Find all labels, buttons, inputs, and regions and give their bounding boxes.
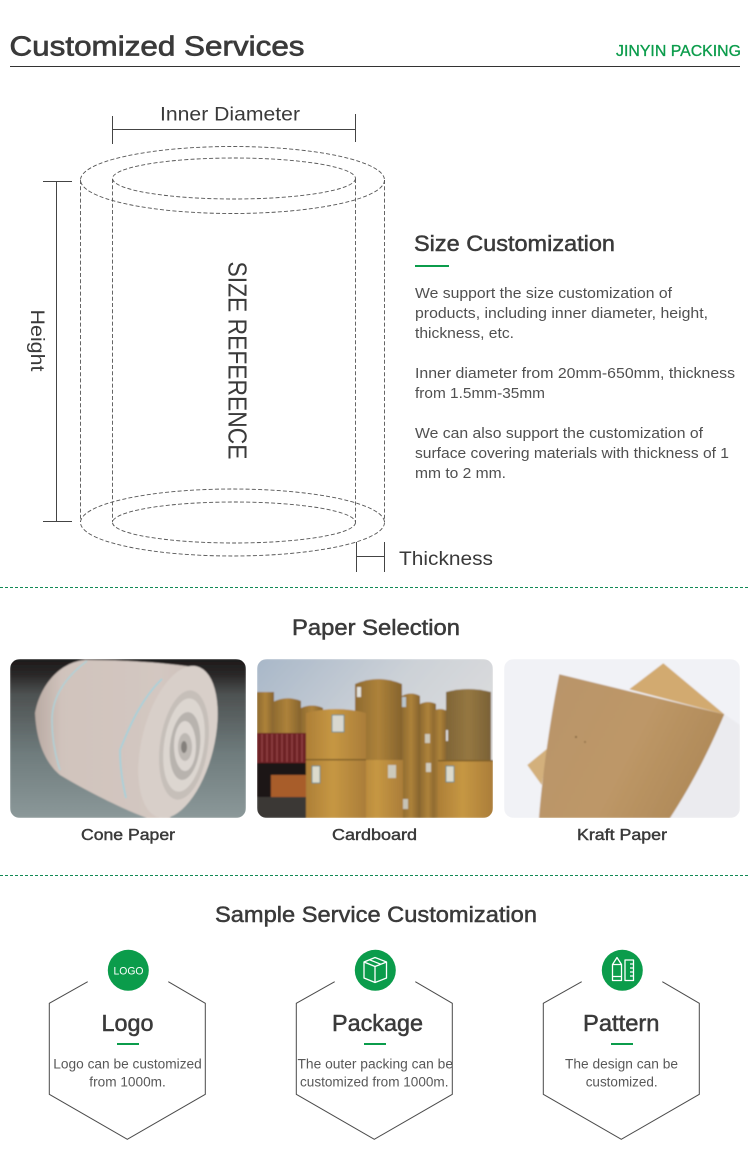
size customization text block — [414, 231, 735, 482]
caption: cardboard: Cardboard — [332, 827, 417, 844]
hexagon outline — [296, 982, 452, 1139]
card description: from 1000m. — [89, 1074, 166, 1090]
caption: cone paper: Cone Paper — [81, 827, 176, 844]
header — [10, 30, 741, 66]
card description: The outer packing can be — [298, 1056, 453, 1072]
sample service heading: Sample Service Customization — [215, 902, 537, 927]
paragraph: products: We support the size customization of — [415, 286, 673, 302]
paragraph: products — [415, 286, 708, 342]
icon: pencil and ruler — [602, 950, 643, 991]
card description: customized. — [586, 1074, 658, 1090]
paragraph: surface materials: surface covering materials with thickness of 1 — [415, 446, 729, 462]
paragraph: products: products, including inner diameter, height, — [415, 306, 708, 322]
height dimension: Height — [26, 310, 47, 372]
hexagon outline — [49, 982, 205, 1139]
caption: kraft paper: Kraft Paper — [577, 827, 668, 844]
thickness dimension: Thickness — [399, 549, 493, 570]
brand name: JINYIN PACKING — [616, 43, 741, 60]
card heading: Logo — [102, 1010, 154, 1036]
card description — [298, 1056, 453, 1090]
dashed cylinder — [80, 146, 384, 556]
card: package — [296, 950, 453, 1139]
photo: kraft paper — [504, 659, 740, 818]
card: pattern — [543, 950, 699, 1139]
hexagon outline — [543, 982, 699, 1139]
paragraph: ranges: Inner diameter from 20mm-650mm, thickness — [415, 366, 735, 382]
green accent bar — [415, 265, 449, 267]
photo: cone paper roll — [10, 658, 246, 826]
title: Customized Services — [10, 30, 304, 62]
inner diameter dimension — [112, 104, 356, 144]
green accent bar — [117, 1043, 139, 1045]
card heading: Package — [332, 1010, 423, 1036]
size reference diagram — [26, 104, 493, 572]
photo: cardboard rolls — [257, 659, 493, 818]
green accent bar — [364, 1043, 386, 1045]
thickness dimension — [356, 542, 493, 572]
heading: Size Customization — [414, 231, 615, 256]
paragraph: surface materials — [415, 426, 729, 482]
card: logo — [49, 950, 205, 1139]
card description — [53, 1056, 202, 1090]
card description: The design can be — [565, 1056, 678, 1072]
card description — [565, 1056, 678, 1090]
card description: Logo can be customized — [53, 1056, 202, 1072]
icon: logo badge — [108, 950, 149, 991]
green accent bar — [611, 1043, 633, 1045]
card heading: Pattern — [583, 1010, 660, 1036]
photo captions — [81, 827, 668, 844]
card description: customized from 1000m. — [300, 1074, 448, 1090]
paragraph: ranges — [415, 366, 735, 402]
paragraph: surface materials: We can also support the customization of — [415, 426, 704, 442]
inner diameter dimension: Inner Diameter — [160, 104, 301, 126]
paragraph: surface materials: mm to 2 mm. — [415, 466, 506, 482]
header rule — [10, 66, 740, 68]
paragraph: products: thickness, etc. — [415, 326, 514, 342]
size reference vertical label: SIZE REFERENCE — [222, 262, 250, 460]
icon: box — [355, 950, 396, 991]
icon: logo badge: LOGO — [114, 965, 144, 977]
paragraph: ranges: from 1.5mm-35mm — [415, 386, 545, 402]
height dimension — [26, 182, 72, 522]
paper selection heading: Paper Selection — [292, 615, 460, 640]
